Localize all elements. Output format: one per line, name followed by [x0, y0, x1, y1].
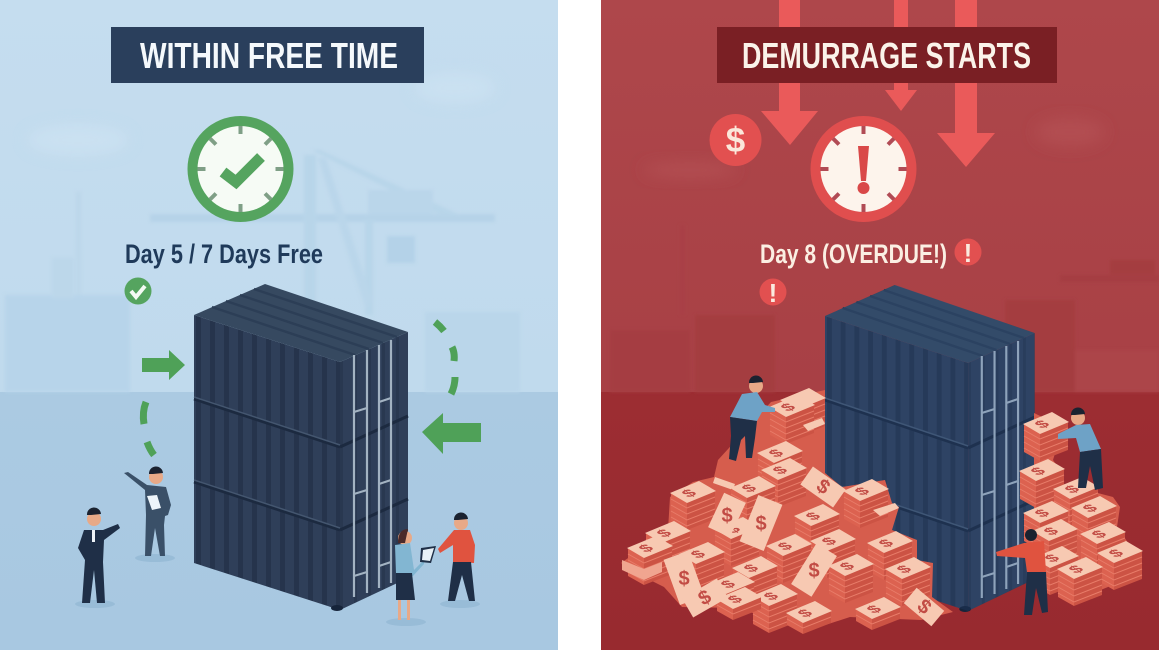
money pile: right: $ [1104, 547, 1128, 560]
money pile: left: $ [773, 540, 797, 553]
money pile: left: $ [835, 560, 859, 573]
money pile: left: $ [739, 562, 763, 575]
arrow: large red down left [761, 0, 818, 145]
panel: within free time [0, 0, 558, 650]
money pile: left: $ [723, 593, 747, 606]
money pile: right: $ [1026, 465, 1050, 478]
money pile: left: $ [652, 527, 676, 540]
money pile: right [1019, 412, 1143, 606]
figure: man in red sweater [438, 512, 480, 608]
panel: demurrage starts [601, 0, 1159, 650]
figure: man with clipboard [124, 466, 175, 562]
figure: woman with tablet [386, 529, 436, 626]
loose banknotes: $ [721, 505, 733, 527]
arrow: dashed arc left [143, 402, 154, 455]
arrow: small red down centre [885, 0, 917, 111]
arrow: dashed arc right [435, 322, 455, 394]
loose banknotes: $ [913, 595, 935, 619]
arrow: green pointing right [142, 350, 185, 380]
figure: man in suit gesturing [75, 507, 120, 608]
icon: alert badge right [954, 238, 982, 268]
heading banner: within free time [111, 27, 424, 83]
money pile: left: $ [850, 485, 874, 498]
heading banner: demurrage starts: DEMURRAGE STARTS [742, 35, 1031, 76]
money pile: left: $ [776, 401, 800, 414]
money pile: right: $ [1078, 502, 1102, 515]
money pile: left: $ [634, 542, 658, 555]
figure: worker climbing left pile [729, 375, 775, 461]
container stack: left [194, 284, 408, 611]
loose banknotes: $ [678, 568, 690, 590]
icon: dollar coin [710, 114, 762, 166]
money pile: left: $ [686, 548, 710, 561]
money pile: left: $ [892, 563, 916, 576]
loose banknotes: $ [808, 560, 820, 582]
money pile: right: $ [1064, 563, 1088, 576]
arrow: green pointing left [422, 413, 481, 454]
money pile: left [621, 388, 953, 634]
icon: green clock with check [188, 116, 294, 222]
heading banner: demurrage starts [717, 27, 1057, 83]
background: faint port skyline and crane [5, 74, 520, 392]
text: day overdue: Day 8 (OVERDUE!) [760, 239, 947, 269]
money pile: left: $ [817, 535, 841, 548]
money pile: right: $ [1039, 525, 1063, 538]
loose banknotes: $ [695, 586, 715, 610]
icon: alert badge left [760, 278, 786, 308]
money pile: left: $ [716, 578, 740, 591]
loose banknotes: $ [755, 513, 767, 535]
money pile: right: $ [1087, 528, 1111, 541]
container stack: right [825, 285, 1035, 612]
icon: dollar coin: $ [726, 121, 745, 160]
money pile: left: $ [737, 482, 761, 495]
money pile: right: $ [1030, 507, 1054, 520]
loose banknotes [664, 467, 945, 627]
money pile: left: $ [759, 590, 783, 603]
icon: alert badge right: ! [964, 238, 972, 268]
arrow: large red down right [937, 0, 995, 167]
money pile: left: $ [793, 607, 817, 620]
money pile: right: $ [1030, 418, 1054, 431]
money pile: left: $ [801, 510, 825, 523]
figure: worker in red at container [996, 529, 1048, 615]
figure: worker climbing right pile [1058, 407, 1103, 490]
money pile: right: $ [1060, 483, 1084, 496]
money pile: left: $ [764, 447, 788, 460]
heading banner: within free time: WITHIN FREE TIME [140, 35, 398, 76]
text: day counter: Day 5 / 7 Days Free [125, 239, 323, 269]
background: faint port skyline [610, 118, 1159, 392]
money pile: left: $ [862, 603, 886, 616]
icon: red clock with exclamation [810, 116, 916, 222]
icon: alert badge left: ! [769, 278, 777, 308]
money pile: right: $ [1040, 552, 1064, 565]
money pile: left: $ [874, 537, 898, 550]
money pile: left: $ [787, 394, 811, 407]
icon: small check badge [124, 278, 152, 304]
loose banknotes: $ [812, 475, 834, 499]
money pile: left: $ [768, 464, 792, 477]
money pile: left: $ [721, 523, 745, 536]
money pile: left: $ [677, 487, 701, 500]
